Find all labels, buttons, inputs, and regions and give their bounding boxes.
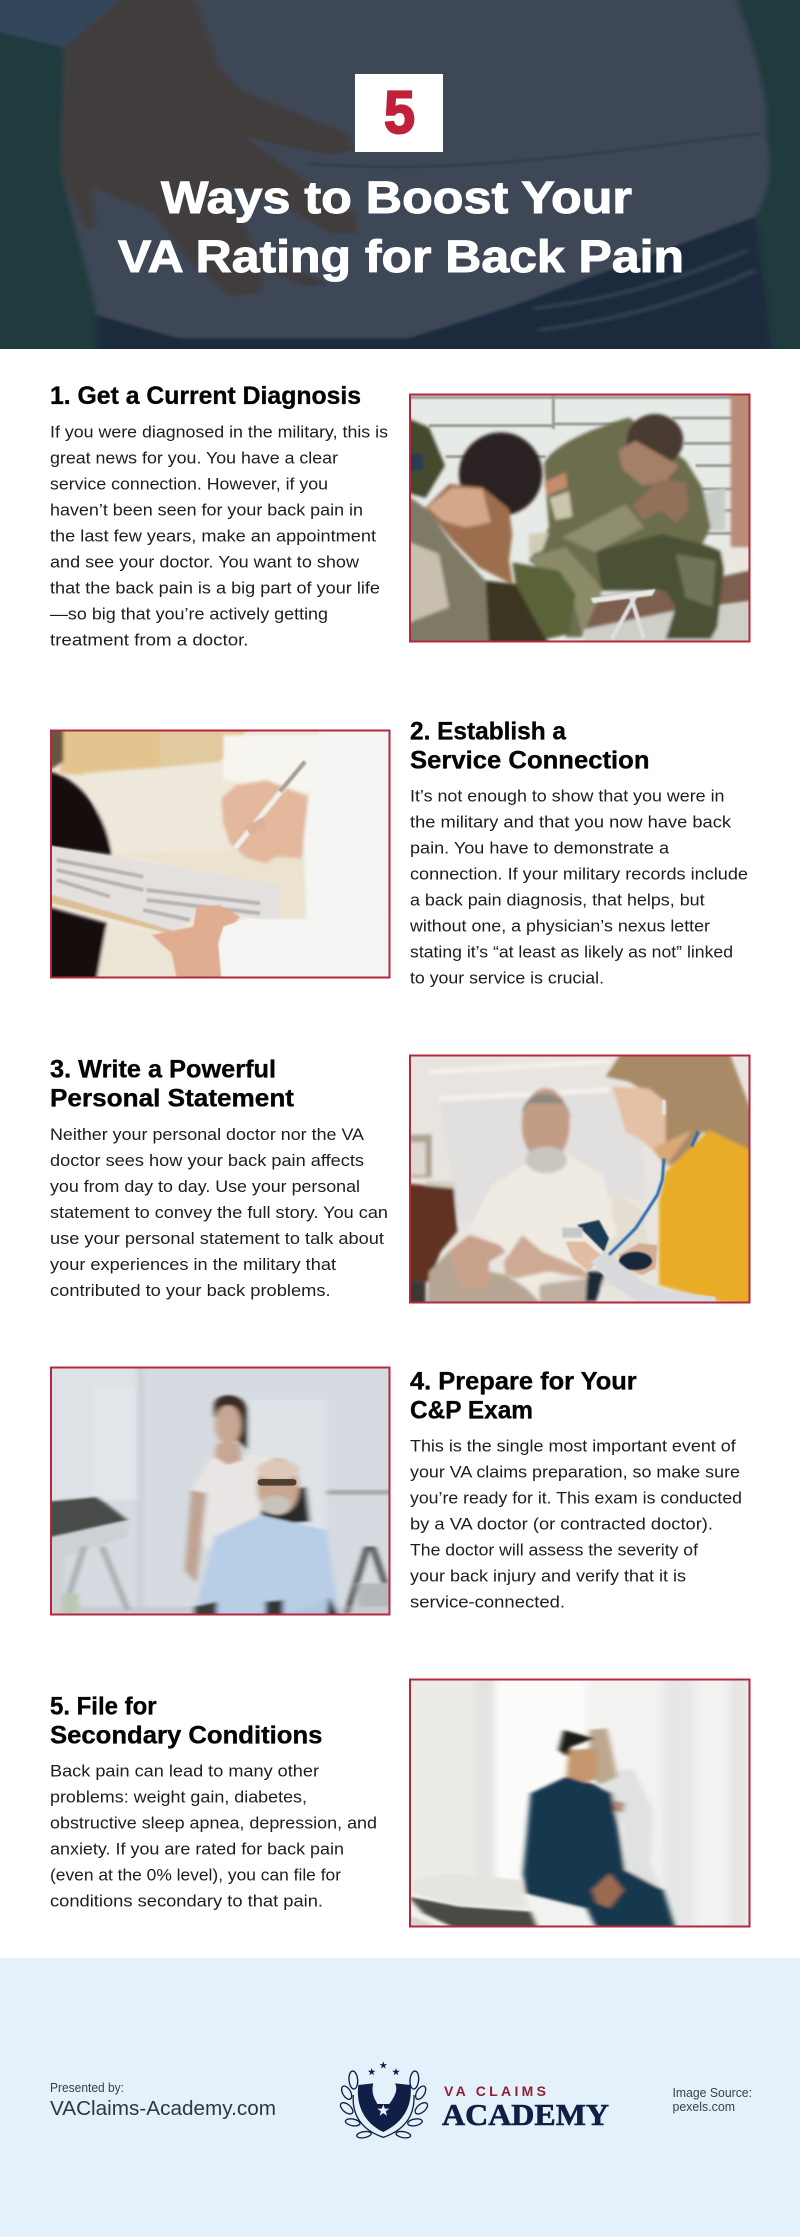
text block: step 1: the last few years, make an appointment [50, 527, 376, 546]
text block: step 1: If you were diagnosed in the military, this is [50, 423, 388, 442]
heading: step 2: Service Connection [410, 747, 650, 775]
text block: presented by: Presented by: [50, 2080, 124, 2095]
text block: step 2 [409, 787, 748, 988]
text block: step 1: —so big that you’re actively getting [50, 605, 328, 624]
text block: step 5: problems: weight gain, diabetes, [50, 1788, 307, 1807]
text block: step 4: your back injury and verify that it is [410, 1567, 686, 1586]
heading: step 4: C&P Exam [410, 1397, 533, 1425]
text block: step 4: service-connected. [410, 1593, 565, 1612]
title: Ways to Boost Your [161, 172, 632, 223]
logo: VA Claims Academy [338, 2061, 609, 2139]
heading: step 4: 4. Prepare for Your [410, 1368, 637, 1396]
text block: step 1: haven’t been seen for your back pain in [50, 501, 363, 520]
photo: nurse taking blood pressure [406, 1052, 754, 1307]
heading: step 2 [410, 718, 650, 775]
text block: step 4 [410, 1437, 742, 1612]
text block: step 1 [50, 423, 388, 650]
text block: step 3 [50, 1125, 388, 1300]
text block: step 5: conditions secondary to that pain. [50, 1892, 323, 1911]
text block: step 3: doctor sees how your back pain affects [50, 1151, 364, 1170]
photo: soldiers with heads in hands [406, 391, 754, 646]
heading: step 2: 2. Establish a [410, 718, 567, 746]
panel: step 4 [46, 1363, 742, 1620]
heading: step 3: Personal Statement [50, 1085, 295, 1113]
text block: step 4: The doctor will assess the severity of [410, 1541, 698, 1560]
icon: eagle shield with laurel [338, 2061, 430, 2139]
heading: step 4 [410, 1368, 637, 1425]
text block: step 1: great news for you. You have a clear [50, 449, 338, 468]
heading: step 5 [50, 1692, 322, 1749]
text block: step 3: your experiences in the military that [50, 1255, 336, 1274]
text block: step 5: anxiety. If you are rated for back pain [50, 1840, 344, 1859]
text block: step 2: to your service is crucial. [410, 969, 604, 988]
text block: step 1: and see your doctor. You want to show [50, 553, 360, 572]
text block: step 2: stating it’s “at least as likely as not” linked [410, 943, 733, 962]
logo: VA Claims Academy: ACADEMY [442, 2097, 609, 2132]
text block: presented by [50, 2080, 276, 2120]
text block: presented by: VAClaims-Academy.com [50, 2098, 276, 2120]
panel: step 5 [50, 1673, 760, 1933]
heading: step 5: Secondary Conditions [50, 1721, 322, 1749]
text block: step 2: connection. If your military records include [410, 865, 748, 884]
text block: step 2: It’s not enough to show that you were in [410, 787, 724, 806]
text block: step 2: without one, a physician’s nexus letter [409, 917, 710, 936]
panel: step 3 [50, 1052, 754, 1307]
panel: footer [0, 1958, 800, 2237]
text block: step 4: you’re ready for it. This exam is conducted [410, 1489, 742, 1508]
text block: step 3: you from day to day. Use your personal [50, 1177, 360, 1196]
text block: image source: Image Source: [672, 2086, 752, 2100]
text block: image source [672, 2086, 752, 2114]
photo: doctor consoling patient on bed [403, 1673, 760, 1933]
text block: step 1: treatment from a doctor. [50, 631, 249, 650]
panel: header [0, 0, 800, 357]
text block: step 2: a back pain diagnosis, that helps, but [410, 891, 705, 910]
text block: image source: pexels.com [672, 2100, 735, 2114]
text block: step 4: This is the single most important event of [410, 1437, 736, 1456]
heading: step 3: 3. Write a Powerful [50, 1055, 276, 1083]
number badge: 5 [384, 79, 415, 146]
heading: step 3 [50, 1055, 295, 1113]
text block: step 1: service connection. However, if you [50, 475, 328, 494]
text block: step 5 [50, 1762, 377, 1911]
text block: step 2: the military and that you now have back [410, 813, 732, 832]
title: VA Rating for Back Pain [118, 231, 684, 282]
text block: step 1: that the back pain is a big part of your life [50, 579, 380, 598]
heading: step 1: 1. Get a Current Diagnosis [50, 382, 361, 410]
heading: step 5: 5. File for [50, 1692, 157, 1720]
header photo: hand on lower back [0, 0, 800, 357]
photo: patient and therapist in clinic [46, 1363, 398, 1620]
panel: step 2 [47, 718, 748, 988]
text block: step 4: by a VA doctor (or contracted doctor). [410, 1515, 713, 1534]
number badge [355, 74, 443, 152]
logo: VA Claims Academy: VA CLAIMS [444, 2083, 546, 2099]
text block: step 5: Back pain can lead to many other [50, 1762, 319, 1781]
text block: step 5: (even at the 0% level), you can file for [50, 1866, 341, 1885]
text block: step 3: use your personal statement to talk about [50, 1229, 384, 1248]
text block: step 4: your VA claims preparation, so make sure [410, 1463, 740, 1482]
text block: step 3: Neither your personal doctor nor the VA [50, 1125, 365, 1144]
panel: step 1 [50, 382, 754, 650]
text block: step 3: contributed to your back problems. [50, 1281, 331, 1300]
text block: step 5: obstructive sleep apnea, depression, and [50, 1814, 377, 1833]
text block: step 2: pain. You have to demonstrate a [410, 839, 670, 858]
photo: doctor writing on clipboard [47, 727, 395, 982]
title [118, 172, 684, 282]
text block: step 3: statement to convey the full story. You can [50, 1203, 388, 1222]
